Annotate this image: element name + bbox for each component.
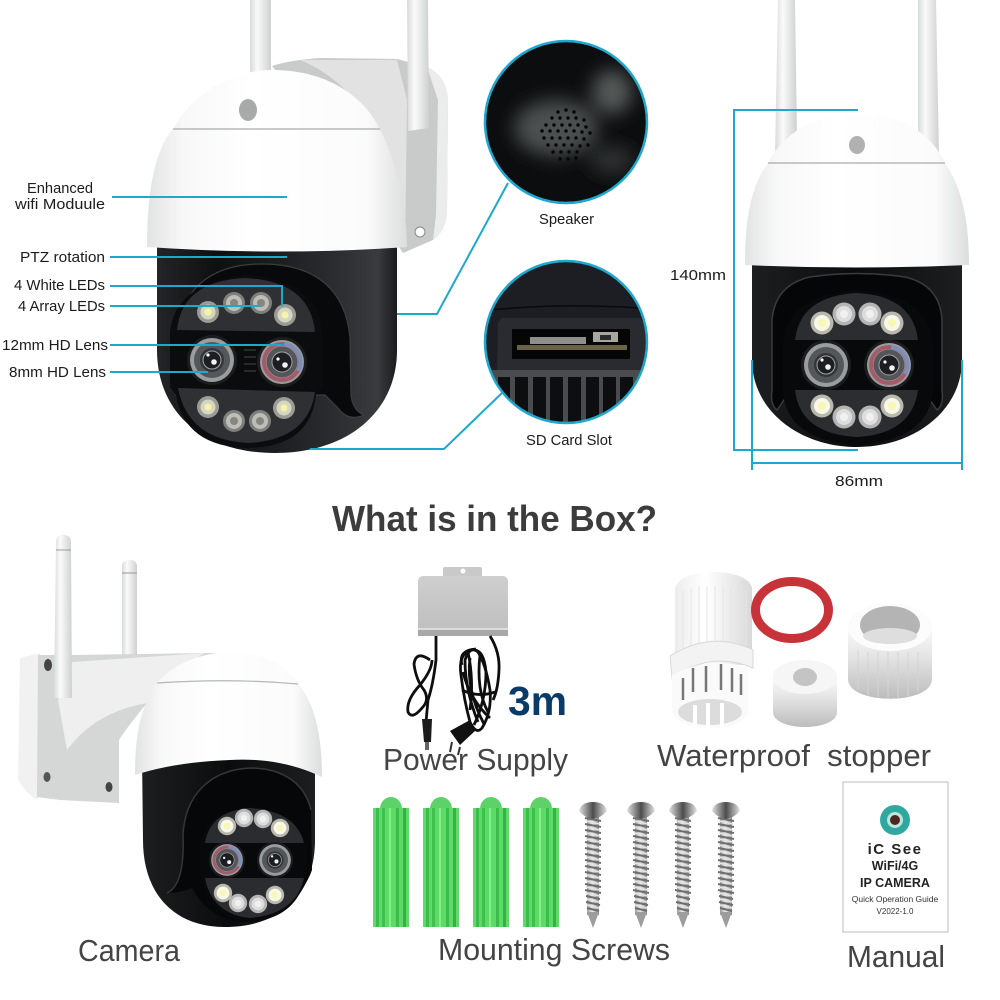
mounting screws caption: Mounting Screws xyxy=(438,932,670,967)
front view camera with dimensions xyxy=(745,0,969,447)
small rubber plug xyxy=(773,677,837,727)
manual caption: Manual xyxy=(847,939,945,974)
front camera LEDs xyxy=(810,312,834,334)
main camera, three-quarter view xyxy=(147,0,448,453)
feature labels: 12mm HD Lens xyxy=(2,337,108,354)
threaded cylinder xyxy=(675,572,752,665)
box item: screws xyxy=(579,802,740,928)
box camera dome xyxy=(135,652,322,777)
wall bracket xyxy=(18,653,240,803)
camera antenna right xyxy=(122,560,137,665)
power supply housing xyxy=(443,567,482,581)
front camera antenna right xyxy=(918,0,939,155)
box item: manual: IP CAMERA xyxy=(860,876,930,890)
feature labels: 4 Array LEDs xyxy=(18,298,105,315)
front camera face xyxy=(783,290,933,445)
box item: camera on wall mount xyxy=(18,535,322,927)
callout lines xyxy=(110,183,508,449)
main camera white dome xyxy=(147,70,407,252)
mains plug xyxy=(450,720,476,745)
threaded nut xyxy=(848,627,932,699)
DC barrel plug xyxy=(422,719,432,742)
width dimension: 86mm xyxy=(835,473,883,490)
red gasket xyxy=(756,582,828,638)
inset: SD card slot xyxy=(484,260,648,424)
box item: manual: WiFi/4G xyxy=(872,859,918,873)
feature labels: 8mm HD Lens xyxy=(9,364,106,381)
speaker holes xyxy=(540,108,592,161)
main camera black body xyxy=(157,245,397,453)
feature labels: wifi Moduule xyxy=(14,196,105,213)
camera antenna left xyxy=(54,535,72,698)
main camera visor xyxy=(173,264,364,417)
box item: manual: Quick Operation Guide xyxy=(852,894,938,904)
box camera body xyxy=(142,755,315,927)
box item: waterproof stopper xyxy=(670,572,932,728)
box item: manual: iC See xyxy=(868,841,922,858)
front camera black body xyxy=(752,258,962,447)
front camera lenses xyxy=(801,340,851,390)
box camera visor xyxy=(167,768,312,922)
box item: manual xyxy=(843,782,948,932)
box camera LEDs xyxy=(218,817,236,835)
front camera visor xyxy=(772,274,942,410)
main camera antenna left xyxy=(250,0,271,76)
section title: What is in the Box? xyxy=(332,498,657,539)
feature labels: 4 White LEDs xyxy=(14,277,105,294)
box camera lenses xyxy=(209,842,245,878)
box item: power supply xyxy=(408,567,508,755)
camera caption: Camera xyxy=(78,933,181,968)
box camera face xyxy=(199,807,307,922)
feature labels xyxy=(2,180,108,381)
power supply caption: Power Supply xyxy=(383,742,568,777)
power cables xyxy=(408,636,499,730)
cable length: 3m xyxy=(508,678,567,724)
height dimension: 140mm xyxy=(670,267,726,284)
main camera lenses xyxy=(187,335,237,385)
speaker label: Speaker xyxy=(539,211,594,228)
main camera antenna right xyxy=(407,0,429,131)
wall mount behind main camera xyxy=(272,58,448,253)
app logo xyxy=(880,805,910,835)
SD card slot label: SD Card Slot xyxy=(526,432,613,449)
main camera indicator window xyxy=(239,99,257,121)
front camera indicator window xyxy=(849,136,865,154)
inset: speaker xyxy=(485,41,647,203)
box item: manual: V2022-1.0 xyxy=(877,907,914,916)
feature labels: PTZ rotation xyxy=(20,249,105,266)
main camera front plate xyxy=(170,275,322,448)
feature labels: Enhanced xyxy=(27,180,93,197)
waterproof stopper caption: Waterproof stopper xyxy=(657,738,931,773)
front camera dome xyxy=(745,113,969,268)
dimension lines xyxy=(734,110,962,470)
box item: wall anchors xyxy=(373,797,559,927)
main camera LEDs xyxy=(197,301,219,323)
front camera antenna left xyxy=(775,0,797,155)
slotted cage xyxy=(672,663,748,728)
